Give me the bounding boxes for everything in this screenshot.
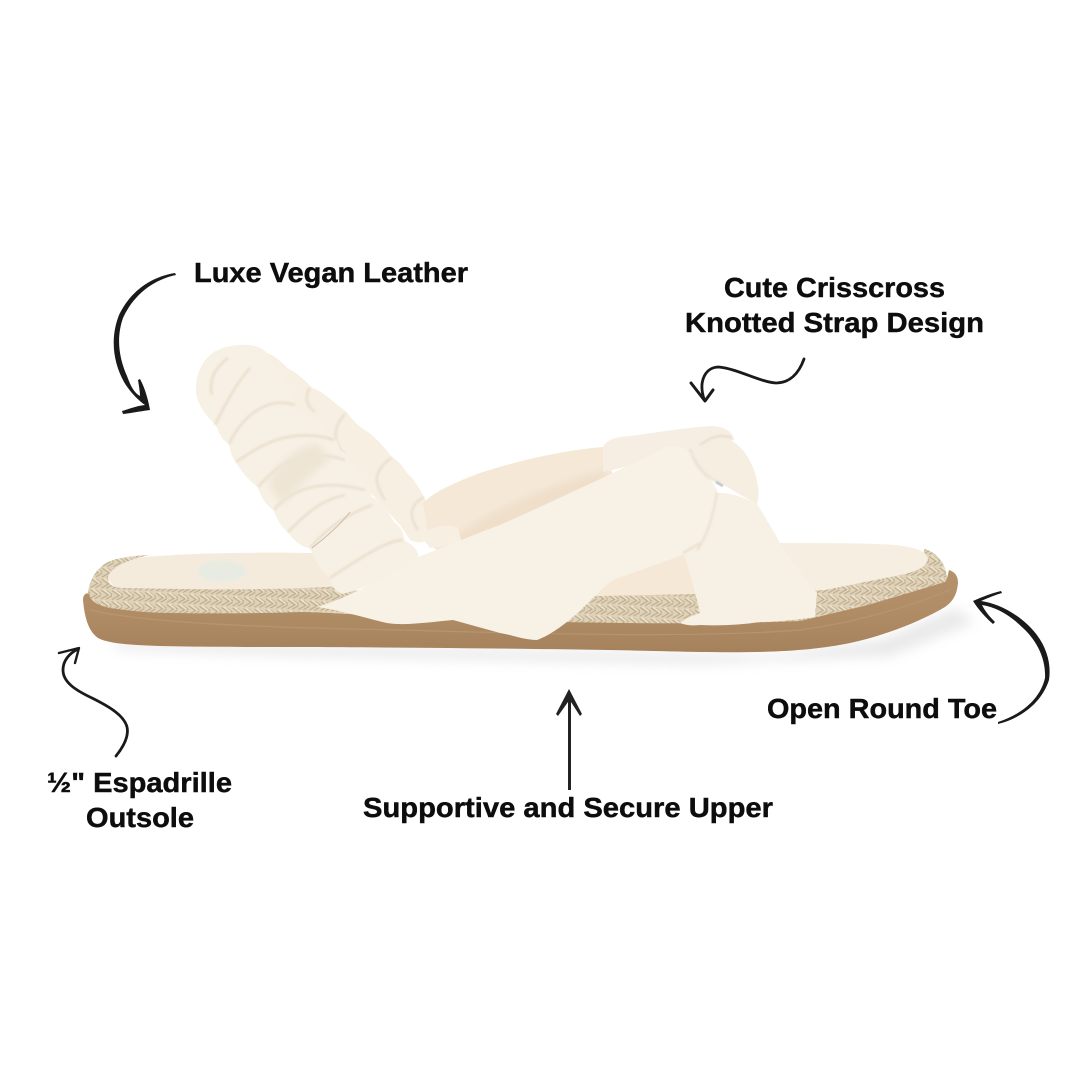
label: Cute Crisscross Knotted Strap Design: Knotted Strap Design <box>685 307 984 338</box>
label: Luxe Vegan Leather: Luxe Vegan Leather <box>194 257 468 288</box>
inner upper lining <box>423 447 700 600</box>
strap edge shadows <box>683 492 717 553</box>
arrow: to espadrille outsole <box>59 648 127 756</box>
toe footbed <box>760 543 928 595</box>
footbed logo <box>197 560 247 582</box>
strap wrinkles <box>211 358 403 578</box>
arrow: to supportive upper <box>556 689 582 790</box>
arrow: to round toe <box>973 591 1050 724</box>
label: Cute Crisscross Knotted Strap Design: Cute Crisscross <box>724 272 945 303</box>
knot gap <box>716 482 723 486</box>
knot shading <box>690 436 732 483</box>
rear strap wrinkles <box>307 388 424 530</box>
back strap tail puff <box>420 526 462 548</box>
heel rope welt <box>87 555 345 619</box>
label: 1/2 inch Espadrille Outsole: ½" Espadrille <box>47 767 232 798</box>
toe strap <box>680 493 817 625</box>
label: Cute Crisscross Knotted Strap Design <box>685 272 984 338</box>
label: Supportive and Secure Upper: Supportive and Secure Upper <box>363 792 773 823</box>
label: Open Round Toe: Open Round Toe <box>767 693 997 724</box>
loop band behind knot <box>603 426 734 472</box>
strap shade crease <box>312 512 350 548</box>
back strap, rear layer <box>262 352 436 542</box>
ground shadow <box>110 608 975 664</box>
label: 1/2 inch Espadrille Outsole: Outsole <box>86 802 194 833</box>
strap shade band <box>268 444 330 505</box>
arrow: to knotted strap <box>691 359 804 401</box>
sandal product photo <box>83 345 975 664</box>
label: 1/2 inch Espadrille Outsole <box>47 767 232 833</box>
lining shade <box>450 470 612 550</box>
gathered back strap, front layer <box>196 345 418 594</box>
knot <box>690 439 758 504</box>
toe rope welt <box>815 549 949 622</box>
mid rope welt <box>340 590 830 630</box>
outsole <box>83 570 958 652</box>
outsole highlight <box>90 590 950 635</box>
arrow: to vegan leather strap <box>114 273 176 414</box>
wide front strap <box>317 446 717 640</box>
heel footbed <box>107 553 345 590</box>
